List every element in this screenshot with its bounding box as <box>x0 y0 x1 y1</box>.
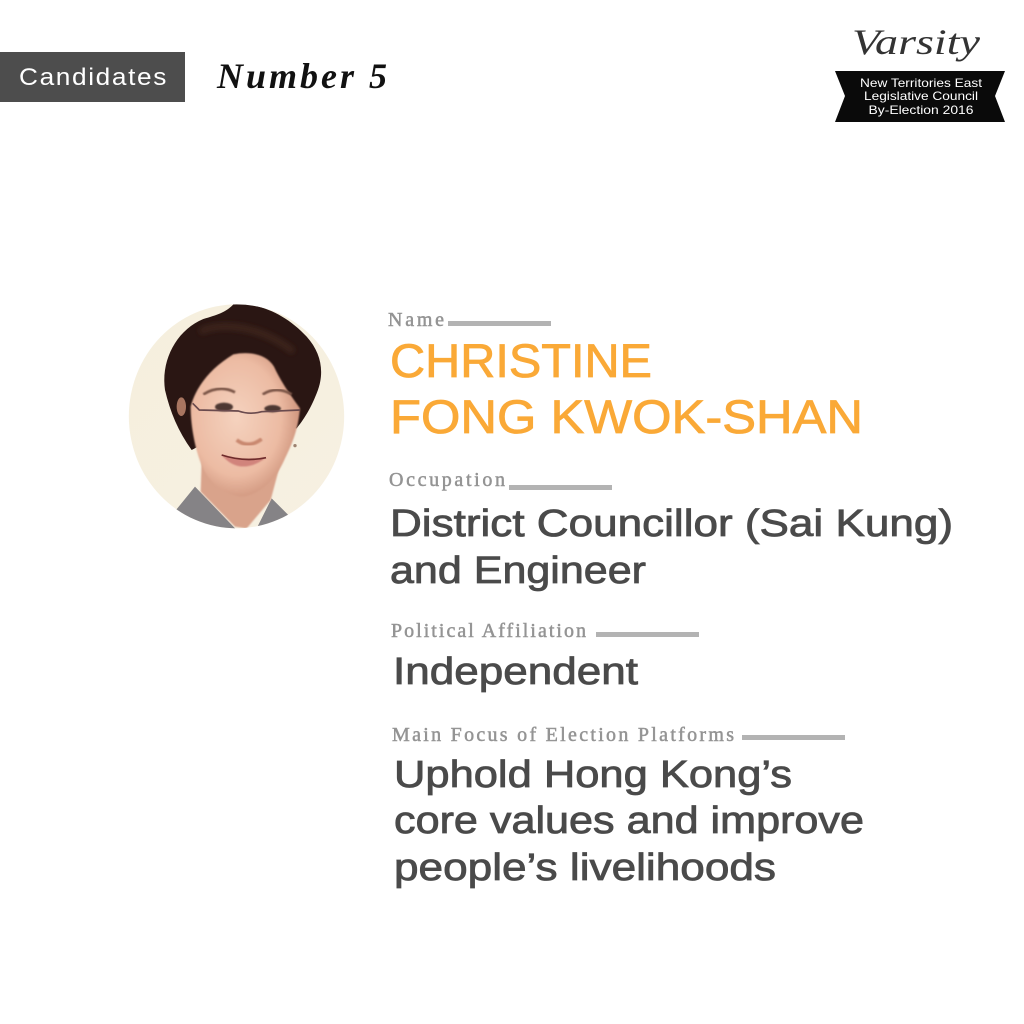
ribbon: by-election: Legislative Council <box>864 89 978 103</box>
nose <box>237 439 262 444</box>
ribbon: by-election: New Territories East <box>860 76 983 90</box>
label: political affiliation: Political Affiliation <box>391 620 586 642</box>
platform: core values and improve <box>394 800 864 842</box>
ear <box>177 397 186 416</box>
label: occupation: Occupation <box>389 469 505 491</box>
platform <box>394 754 864 889</box>
platform: Uphold Hong Kong’s <box>394 754 792 796</box>
portrait <box>128 304 344 528</box>
candidate name: CHRISTINE <box>390 335 652 388</box>
lips <box>222 455 266 466</box>
candidate name: FONG KWOK-SHAN <box>390 391 863 444</box>
label: name <box>388 309 551 331</box>
label: name: Name <box>388 309 444 331</box>
label: political affiliation <box>391 620 699 642</box>
candidate name <box>390 335 863 444</box>
hair <box>164 304 321 450</box>
jacket <box>176 486 288 528</box>
glasses <box>193 403 300 413</box>
occupation <box>390 503 953 592</box>
affiliation: Independent <box>393 651 639 693</box>
eyebrows <box>203 389 235 394</box>
label: main focus: Main Focus of Election Platforms <box>392 724 734 746</box>
heading: number: Number 5 <box>216 56 387 96</box>
candidates tab: Candidates <box>19 64 168 91</box>
logo: Varsity: Varsity <box>852 22 980 62</box>
neck <box>201 462 280 528</box>
occupation: and Engineer <box>390 550 646 592</box>
occupation: District Councillor (Sai Kung) <box>390 503 953 545</box>
ribbon: by-election <box>835 71 1005 122</box>
hair shine <box>200 326 293 352</box>
label: occupation <box>389 469 612 491</box>
platform: people’s livelihoods <box>394 847 776 889</box>
candidates tab <box>0 52 185 102</box>
face <box>191 353 300 497</box>
earring <box>293 444 297 447</box>
ribbon: by-election: By-Election 2016 <box>868 103 974 117</box>
eyes <box>215 403 233 411</box>
